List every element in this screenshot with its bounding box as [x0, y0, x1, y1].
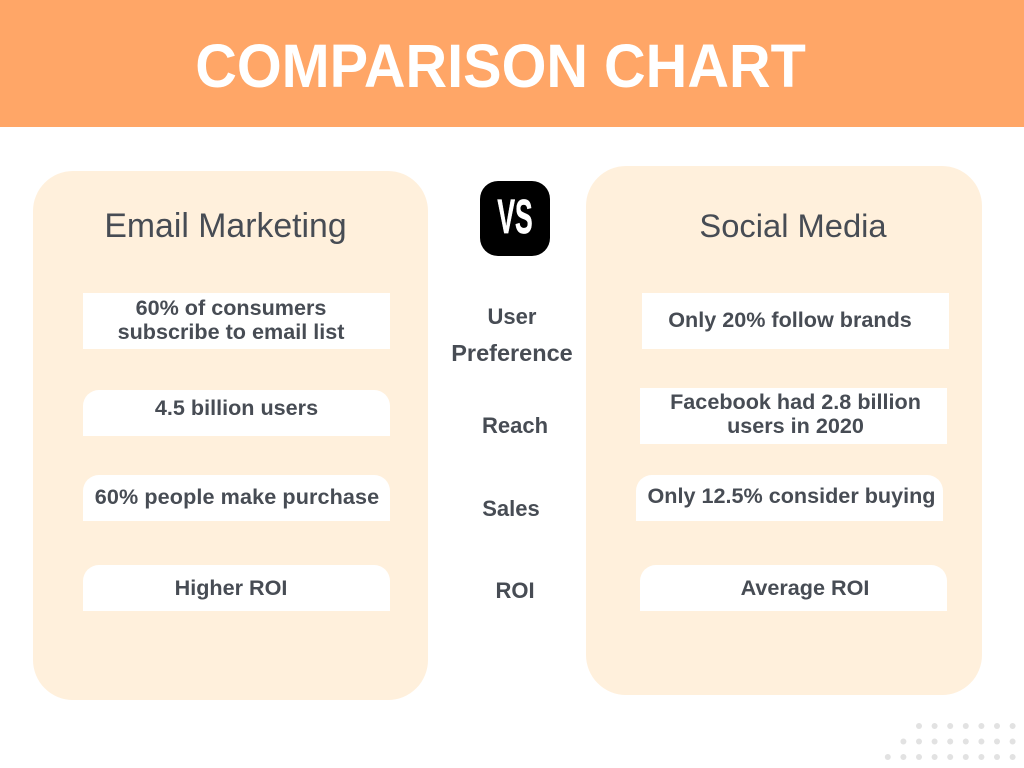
icon: vs badge	[480, 181, 550, 256]
social row 2 text: users in 2020	[727, 413, 864, 438]
social row 2 text	[670, 389, 921, 438]
email row 4 text: Higher ROI	[175, 575, 287, 600]
dot pattern	[884, 723, 1016, 760]
vs text: VS	[497, 191, 533, 244]
title banner	[0, 0, 1024, 127]
label: reach: Reach	[482, 413, 548, 438]
email row 1 text: 60% of consumers	[136, 295, 326, 320]
email row 2 text: 4.5 billion users	[155, 395, 318, 420]
email row 3	[83, 475, 390, 521]
email row 1	[83, 293, 390, 349]
title: COMPARISON CHART	[195, 32, 806, 100]
social row 2	[640, 388, 947, 444]
email row 3 text: 60% people make purchase	[95, 484, 379, 509]
email row 4	[83, 565, 390, 611]
email row 2	[83, 390, 390, 436]
label: user preference	[451, 304, 573, 366]
social row 1 text: Only 20% follow brands	[668, 307, 912, 332]
email row 1 text	[118, 295, 344, 344]
social row 4	[640, 565, 947, 611]
social row 4 text: Average ROI	[741, 575, 869, 600]
label: roi: ROI	[495, 578, 535, 603]
label: user preference: User	[488, 304, 536, 329]
panel: email marketing	[33, 171, 428, 700]
panel: social media	[586, 166, 982, 695]
social row 3 text: Only 12.5% consider buying	[648, 483, 936, 508]
social row 3	[636, 475, 943, 521]
label: user preference: Preference	[451, 340, 573, 366]
social row 1	[642, 293, 949, 349]
heading: email marketing: Email Marketing	[104, 207, 347, 245]
email row 1 text: subscribe to email list	[118, 319, 344, 344]
heading: social media: Social Media	[699, 207, 887, 244]
social row 2 text: Facebook had 2.8 billion	[670, 389, 921, 414]
label: sales: Sales	[482, 496, 540, 521]
